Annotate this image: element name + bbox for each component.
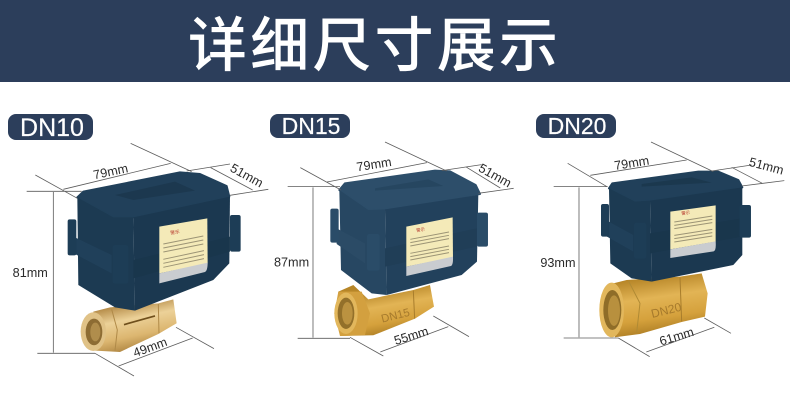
valve: DN10 [13, 143, 268, 376]
dim label: 87mm: 87mm [274, 256, 309, 270]
brass body: DN20 [650, 300, 683, 321]
dim label: 79mm: 79mm [613, 154, 650, 173]
brass body [81, 299, 177, 352]
dim label: 79mm: 79mm [356, 155, 393, 174]
actuator box [68, 172, 241, 311]
dim label: 51mm: 51mm [476, 161, 514, 190]
dim label: 51mm: 51mm [228, 161, 265, 190]
warning label: 警示 [681, 209, 691, 217]
warning label [159, 218, 208, 283]
dim label: 79mm: 79mm [92, 161, 129, 182]
warning label: 警示 [416, 225, 426, 234]
dim label: 61mm: 61mm [658, 325, 695, 349]
dimension lines [554, 142, 784, 357]
title: 详细尺寸展示 [188, 0, 561, 83]
dimension lines [27, 143, 268, 376]
dim label: 51mm: 51mm [748, 155, 785, 178]
badge: DN15: DN15 [282, 113, 340, 139]
brass body: DN15 [380, 307, 411, 326]
valve: DN15 [274, 142, 514, 356]
brass body [334, 285, 434, 336]
actuator box [330, 171, 488, 295]
brass body [599, 273, 708, 337]
valve: DN20 [540, 142, 785, 357]
badge: DN10: DN10 [20, 114, 84, 142]
dim label: 55mm: 55mm [392, 324, 430, 348]
warning label [406, 217, 453, 276]
actuator box [601, 172, 751, 282]
dimension lines [288, 142, 514, 356]
badge: DN20: DN20 [548, 113, 606, 139]
dim label: 81mm: 81mm [13, 266, 48, 280]
dim label: 49mm: 49mm [131, 335, 169, 360]
dim label: 93mm: 93mm [540, 256, 576, 270]
warning label [670, 205, 716, 258]
warning label: 警示 [170, 228, 181, 237]
header banner [0, 0, 790, 83]
